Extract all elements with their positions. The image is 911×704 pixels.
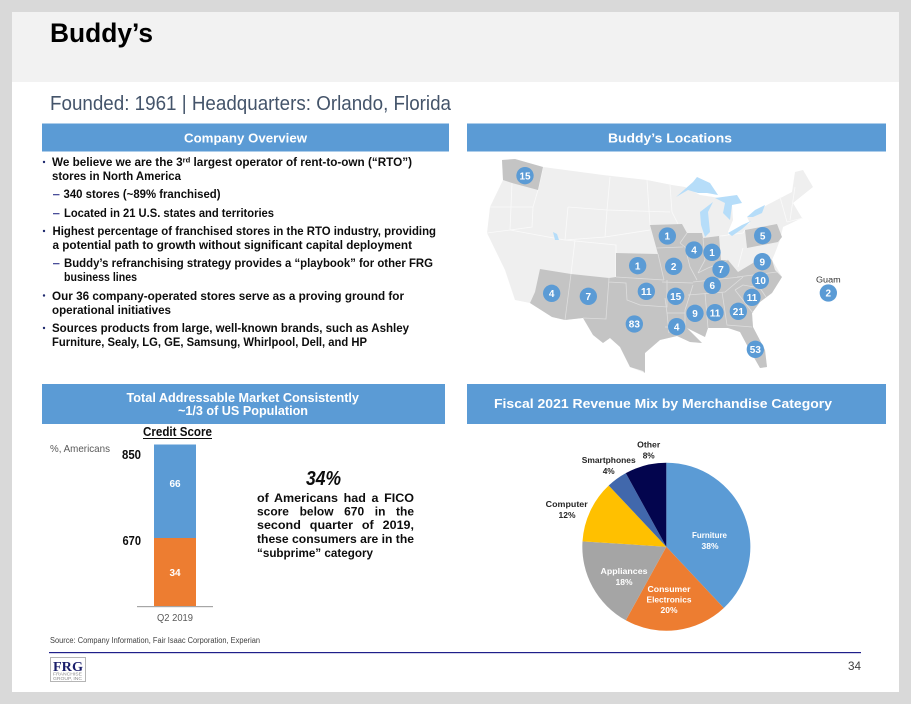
pie labels: Other (637, 440, 661, 450)
callout: 34%: second quarter of 2019, (257, 520, 414, 532)
pie labels: 38% (702, 541, 719, 551)
text block: overview bullets: operational initiatives (52, 305, 171, 317)
text block: overview bullets: Buddy’s refranchising strategy provides a “playbook” for other FRG (64, 258, 433, 270)
chart heading: Credit Score (143, 425, 212, 439)
text block: overview bullets: Sources products from large, well-known brands, such as Ashley (52, 323, 410, 335)
logo: GROUP, INC (53, 676, 83, 681)
map: store counts: 7 (718, 265, 724, 276)
text block: overview bullets: We believe we are the 3 (52, 157, 180, 169)
heading: company overview (42, 124, 449, 152)
callout: 34%: 34% (306, 468, 341, 490)
callout: 34% (257, 468, 414, 560)
panel: revenue mix (467, 384, 886, 631)
text block: overview bullets: Furniture, Sealy, LG, GE, Samsung, Whirlpool, Dell, and HP (52, 337, 367, 349)
map: store counts: 5 (760, 231, 766, 242)
callout: 34%: “subprime” category (257, 548, 374, 560)
pie labels: Consumer (648, 584, 691, 594)
pie labels: Appliances (600, 566, 648, 576)
pie labels: Furniture (692, 530, 727, 540)
panel: company overview (42, 124, 449, 349)
axis note: %, Americans (50, 443, 110, 455)
pie labels: 12% (558, 510, 576, 520)
map: store counts: Guam (816, 275, 841, 285)
map: highlighted states (502, 159, 782, 373)
map: store counts: 4 (691, 246, 697, 257)
heading: company overview: Company Overview (184, 130, 308, 146)
stacked bar chart: Q2 2019 (157, 613, 193, 624)
heading: total addressable market: Total Addressable Market Consistently (126, 390, 360, 405)
text block: overview bullets (43, 156, 436, 349)
callout: 34%: score below 670 in the (257, 506, 414, 518)
logo: FRANCHISE (53, 672, 82, 676)
map: lakes (553, 177, 765, 240)
map: store counts: 53 (750, 345, 761, 356)
map: store count markers (516, 167, 837, 358)
text block: overview bullets: Highest percentage of franchised stores in the RTO industry, providing (52, 226, 436, 238)
callout: 34%: these consumers are in the (257, 534, 414, 546)
pie labels: 18% (616, 577, 633, 587)
panel: locations (467, 124, 886, 373)
source note: Source: Company Information, Fair Isaac Corporation, Experian (50, 636, 260, 645)
pie labels: 20% (660, 605, 678, 615)
heading: locations (467, 124, 886, 152)
heading: revenue mix (467, 384, 886, 424)
title: Buddy’s (50, 18, 153, 48)
footer rule (49, 652, 861, 653)
map: store counts: 11 (747, 293, 758, 304)
callout: 34%: of Americans had a FICO (257, 493, 414, 505)
map: store counts: 15 (519, 171, 531, 182)
map: store counts: 2 (826, 289, 832, 300)
map: store counts: 1 (665, 232, 671, 243)
text block: overview bullets: a potential path to growth without significant capital deployment (52, 240, 412, 252)
map: store counts: 9 (692, 309, 698, 320)
panel: total addressable market (42, 384, 445, 624)
map: US base (487, 159, 813, 373)
text block: overview bullets: stores in North America (52, 171, 182, 183)
text block: overview bullets: business lines (64, 272, 137, 284)
heading: total addressable market (42, 384, 445, 424)
map: store counts: 1 (635, 261, 641, 272)
stacked bar chart: 850 (122, 448, 141, 462)
map: store counts: 6 (710, 281, 716, 292)
map: store counts: 11 (710, 308, 721, 319)
logo (50, 658, 86, 682)
map: store counts: 10 (755, 276, 766, 287)
pie labels: Electronics (646, 594, 692, 604)
text block: overview bullets: Our 36 company-operated stores serve as a proving ground for (52, 291, 405, 303)
text block: overview bullets: Located in 21 U.S. states and territories (64, 208, 274, 220)
page number: 34 (848, 659, 861, 673)
map: light state borders (487, 167, 803, 277)
map: store counts: 4 (674, 322, 680, 333)
map: store counts: 11 (641, 287, 652, 298)
stacked bar chart: 34 (169, 568, 181, 579)
pie labels: 4% (603, 466, 615, 476)
pie labels: Computer (546, 499, 588, 509)
text block: overview bullets: largest operator of rent-to-own (“RTO”) (190, 157, 412, 169)
heading: revenue mix: Fiscal 2021 Revenue Mix by Merchandise Category (494, 396, 833, 411)
pie labels: Smartphones (582, 455, 636, 465)
map: store counts: 7 (586, 292, 592, 303)
stacked bar chart: 66 (169, 479, 181, 490)
heading: total addressable market: ~1/3 of US Population (178, 403, 308, 418)
heading: locations: Buddy’s Locations (608, 130, 732, 146)
stacked bar chart: 670 (122, 534, 141, 548)
map (487, 159, 841, 373)
text block: overview bullets: rd (183, 156, 191, 164)
map: store counts: 9 (760, 257, 766, 268)
logo: FRG (53, 660, 83, 675)
pie labels: 8% (643, 450, 655, 460)
stacked bar chart (122, 444, 213, 624)
map: store counts: 1 (709, 248, 715, 259)
map: store counts: 83 (629, 320, 640, 331)
map: store counts: 2 (671, 262, 677, 273)
map: highlighted state borders (565, 233, 777, 333)
text block: overview bullets: 340 stores (~89% franchised) (64, 189, 221, 201)
header band (12, 12, 899, 82)
map: store counts (519, 171, 841, 356)
map: store counts: 4 (549, 289, 555, 300)
pie chart (546, 440, 750, 631)
map: store counts: 15 (670, 292, 682, 303)
pie labels (546, 440, 727, 615)
map: store counts: 21 (733, 307, 744, 318)
subtitle: Founded: 1961 | Headquarters: Orlando, Florida (50, 93, 452, 115)
